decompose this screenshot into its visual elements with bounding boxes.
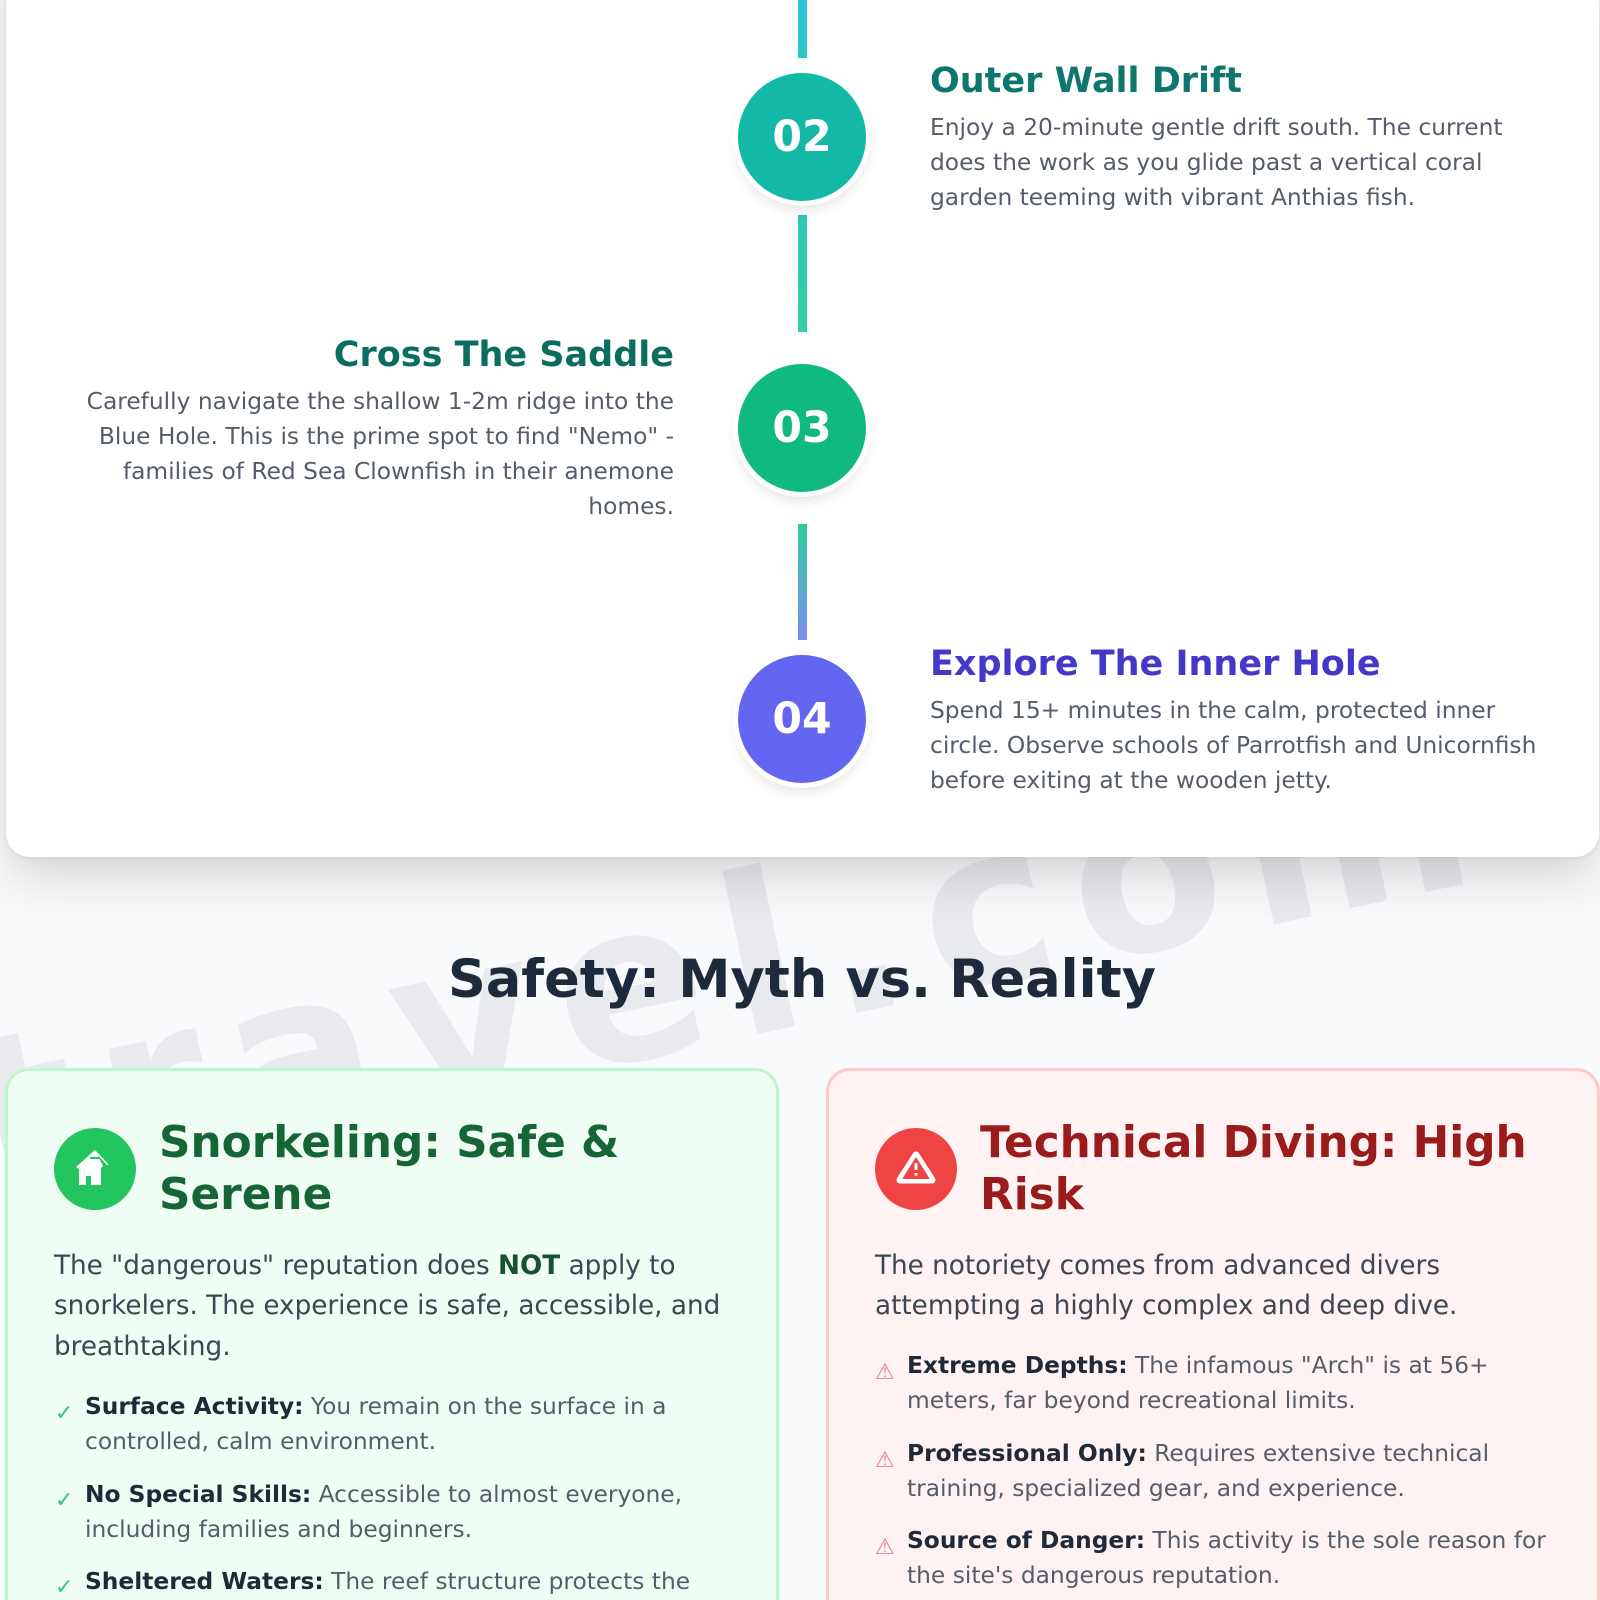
check marker 3: ✓ (55, 1575, 73, 1600)
snorkeling intro: The "dangerous" reputation does NOT apply to (54, 1250, 676, 1280)
icon: house (54, 1128, 136, 1210)
step 03 text: homes. (588, 492, 674, 520)
step 04 text: Spend 15+ minutes in the calm, protected inner (930, 696, 1495, 724)
list item extreme depths: meters, far beyond recreational limits. (907, 1386, 1356, 1414)
panel: technical diving (826, 1068, 1600, 1600)
technical intro: The notoriety comes from advanced divers (875, 1250, 1440, 1280)
step 02 heading: Outer Wall Drift (930, 61, 1242, 101)
step 03 badge: 03 (772, 403, 832, 453)
snorkeling intro (54, 1250, 720, 1362)
step 02 text (930, 112, 1503, 210)
step 03 text: Carefully navigate the shallow 1-2m ridge into the (87, 386, 674, 414)
technical heading: Technical Diving: High (980, 1116, 1527, 1168)
list item source of danger: the site's dangerous reputation. (907, 1561, 1280, 1589)
step 04 badge: 04 (772, 694, 832, 744)
step 04 text: before exiting at the wooden jetty. (930, 766, 1332, 794)
warning marker 2: ⚠ (875, 1448, 895, 1473)
timeline connector segment middle (798, 215, 807, 332)
list item professional only: training, specialized gear, and experience. (907, 1474, 1405, 1502)
panel: route timeline card (6, 0, 1599, 857)
warning marker 3: ⚠ (875, 1535, 895, 1560)
step 03 text (87, 386, 674, 520)
timeline connector segment top (798, 0, 807, 58)
step 04 text: circle. Observe schools of Parrotfish and Unicornfish (930, 730, 1536, 758)
timeline connector segment bottom (798, 524, 807, 640)
list item surface activity (85, 1392, 666, 1455)
step 02 badge: 02 (772, 112, 832, 162)
step 04 text (930, 696, 1536, 794)
snorkeling heading: Serene (159, 1168, 332, 1220)
step 02 badge (738, 73, 866, 201)
list item surface activity: Surface Activity: You remain on the surface in a (85, 1392, 666, 1420)
step 02 text: Enjoy a 20-minute gentle drift south. The current (930, 112, 1503, 140)
list item professional only (907, 1439, 1489, 1502)
warning marker 1: ⚠ (875, 1360, 895, 1385)
list item surface activity: controlled, calm environment. (85, 1427, 436, 1455)
list item source of danger (907, 1526, 1546, 1589)
check marker 2: ✓ (55, 1488, 73, 1513)
list item no special skills (85, 1480, 682, 1543)
technical intro: attempting a highly complex and deep dive. (875, 1291, 1457, 1321)
step 03 badge (738, 364, 866, 492)
technical heading (980, 1116, 1527, 1220)
list item no special skills: including families and beginners. (85, 1515, 472, 1543)
step 02 text: does the work as you glide past a vertical coral (930, 148, 1482, 176)
list item extreme depths (907, 1351, 1489, 1414)
step 02 text: garden teeming with vibrant Anthias fish. (930, 182, 1415, 210)
list item sheltered waters: Sheltered Waters: The reef structure protects the (85, 1567, 690, 1595)
technical intro (874, 1250, 1457, 1321)
icon: warning (875, 1128, 957, 1210)
list item no special skills: No Special Skills: Accessible to almost everyone, (85, 1480, 682, 1508)
panel: snorkeling safe (5, 1068, 779, 1600)
section heading: Safety: Myth vs. Reality (448, 949, 1156, 1010)
step 03 heading: Cross The Saddle (334, 335, 674, 375)
step 04 heading: Explore The Inner Hole (930, 644, 1381, 684)
technical heading: Risk (980, 1168, 1084, 1220)
step 03 text: families of Red Sea Clownfish in their anemone (123, 456, 674, 484)
step 03 text: Blue Hole. This is the prime spot to find "Nemo" - (99, 422, 674, 450)
snorkeling heading (159, 1116, 619, 1220)
snorkeling intro: breathtaking. (54, 1332, 231, 1362)
snorkeling intro: snorkelers. The experience is safe, accessible, and (54, 1291, 720, 1321)
snorkeling heading: Snorkeling: Safe & (159, 1116, 619, 1168)
list item professional only: Professional Only: Requires extensive technical (907, 1439, 1489, 1467)
check marker 1: ✓ (55, 1401, 73, 1426)
list item source of danger: Source of Danger: This activity is the sole reason for (907, 1526, 1546, 1554)
list item extreme depths: Extreme Depths: The infamous "Arch" is at 56+ (907, 1351, 1489, 1379)
step 04 badge (738, 655, 866, 783)
